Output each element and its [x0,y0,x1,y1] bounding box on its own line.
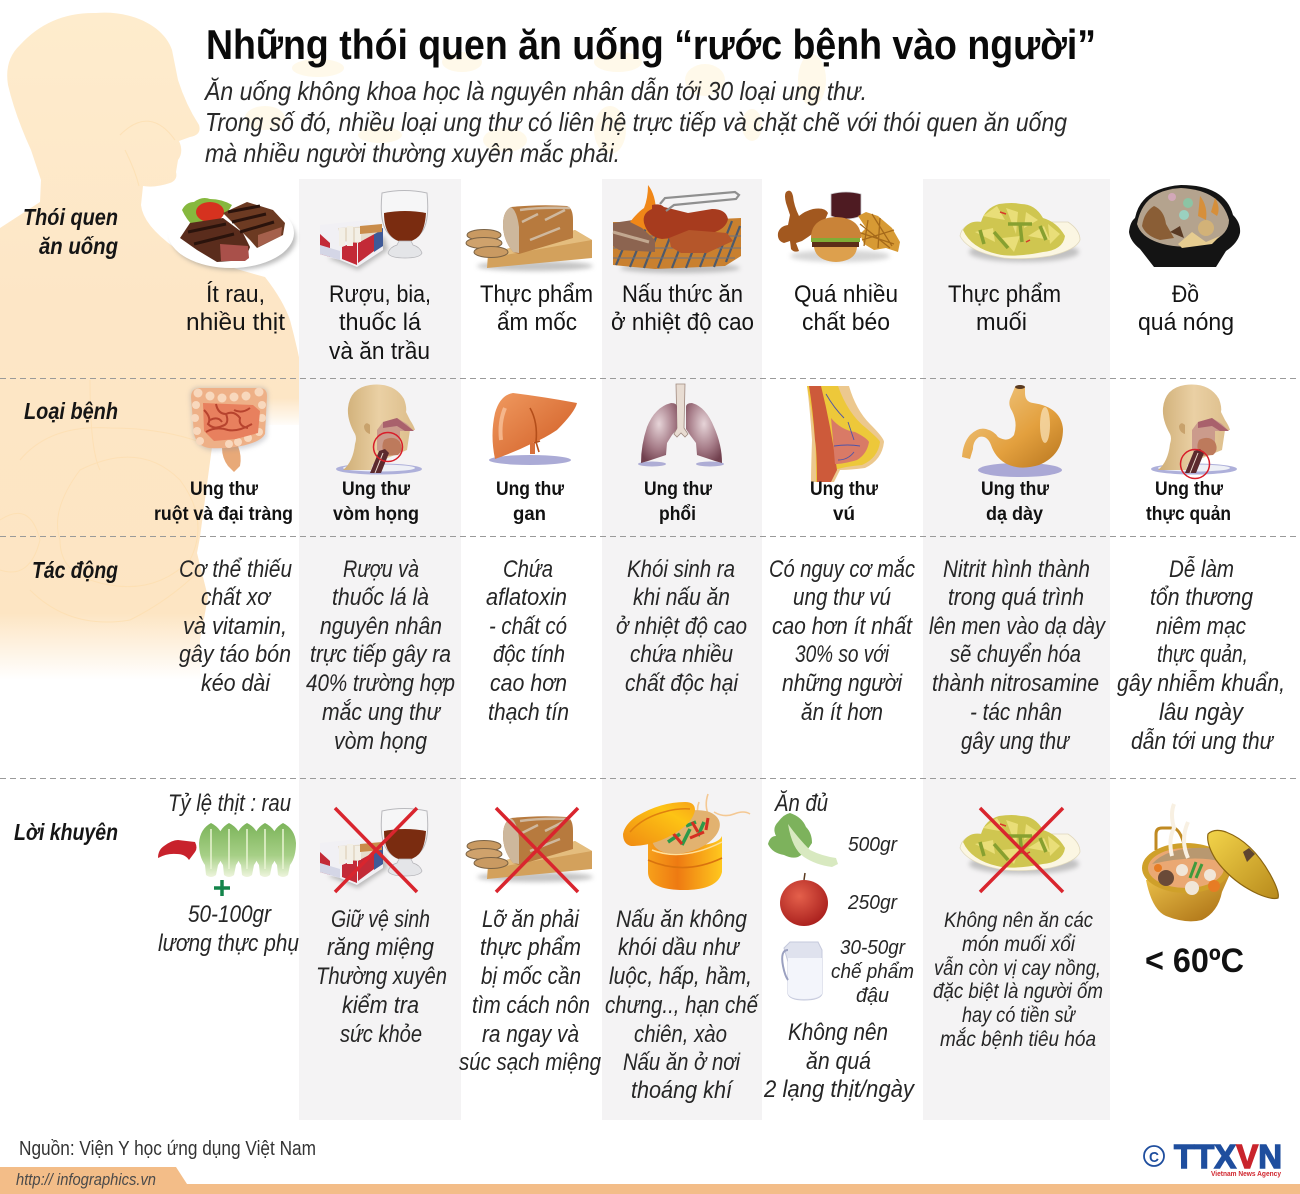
advice: no alcohol and tobacco: sức khỏe [340,1021,422,1048]
logo: TTXVN: C [1149,1149,1159,1166]
row labels: Loại bệnh [24,398,118,424]
impact: breast: ăn ít hơn [801,699,883,726]
advice: no mouldy food: bị mốc cần [481,963,581,990]
advice: avoid salted pickles [933,808,1103,1051]
impact: liver: aflatoxin [486,584,567,611]
impact: colorectal: gây táo bón [179,641,291,668]
impact: stomach: Nitrit hình thành [943,556,1090,583]
disease label: nasopharyngeal cancer: Ung thư [342,478,411,500]
habit label: too much fat: Quá nhiều [794,281,898,308]
impact: liver [486,556,569,726]
habit label: mouldy food [480,281,593,336]
disease label: stomach cancer: dạ dày [986,503,1043,525]
habit label: food too hot [1138,281,1234,336]
impact: liver: - chất có [489,613,567,640]
advice: steamer and gentle cooking: Nấu ăn không [616,906,748,933]
habit label: food too hot: quá nóng [1138,309,1234,336]
advice: no mouldy food: Lỡ ăn phải [482,906,580,933]
advice: balanced portions: 500gr [848,834,898,856]
disease label: colorectal cancer: ruột và đại tràng [154,503,293,525]
impact: breast: 30% so với [795,641,890,668]
row: impact text [179,555,1285,755]
footer band with url: http:// infographics.vn [16,1170,156,1189]
advice: balanced portions: 2 lạng thịt/ngày [763,1076,916,1103]
icon: grilled meat on fire [613,185,741,273]
impact: oesophagus: dẫn tới ung thư [1131,727,1275,755]
advice: no mouldy food: tìm cách nôn [472,992,590,1019]
advice: no alcohol and tobacco [316,808,447,1048]
row: disease types [154,384,1237,525]
advice: steamer and gentle cooking: luộc, hấp, hầm, [609,963,752,990]
impact: stomach: gây ung thư [961,728,1071,755]
impact: colorectal: kéo dài [201,670,271,697]
impact: lung: chất độc hại [625,670,739,697]
impact: lung: chứa nhiều [630,641,733,668]
advice: balanced portions: Ăn đủ [773,790,828,817]
advice: steamer and gentle cooking: chưng.., hạn chế [605,992,759,1019]
impact: colorectal: chất xơ [201,584,272,611]
grey column backgrounds [299,179,1110,1120]
impact: stomach [929,556,1107,755]
habit label: mouldy food: Thực phẩm [480,281,593,308]
disease label: breast cancer: vú [833,503,855,525]
advice: meat to vegetable ratio: Tỷ lệ thịt : rau [168,790,291,817]
impact: stomach: lên men vào dạ dày [929,613,1107,640]
impact: oesophagus: tổn thương [1150,584,1254,611]
disease label: nasopharyngeal cancer: vòm họng [333,503,419,525]
impact: lung [616,556,747,697]
logo: TTXVN: Vietnam News Agency [1211,1169,1282,1178]
disease label: oesophageal cancer: thực quản [1146,503,1231,525]
impact: liver: cao hơn [490,670,567,697]
impact: stomach: sẽ chuyển hóa [950,641,1081,668]
advice: no mouldy food: súc sạch miệng [459,1049,602,1076]
subtitle [203,76,1067,168]
impact: colorectal [179,556,292,697]
impact: lung: khi nấu ăn [633,584,730,611]
impact: oesophagus: niêm mạc [1156,613,1246,640]
impact: nasopharyngeal: trực tiếp gây ra [310,641,451,668]
advice: no alcohol and tobacco: răng miệng [327,934,435,961]
impact: nasopharyngeal: 40% trường hợp [306,670,455,697]
advice: steamer and gentle cooking [605,794,759,1104]
disease label: liver cancer: gan [513,503,546,525]
icon: cigarettes and wine [320,190,428,270]
impact: oesophagus [1117,555,1285,755]
source: Nguồn: Viện Y học ứng dụng Việt Nam [19,1138,316,1160]
icon: stomach [962,385,1063,477]
disease label: liver cancer: Ung thư [496,478,565,500]
body silhouette background [0,13,318,680]
advice: meat to vegetable ratio: lương thực phụ [158,930,299,957]
habit label: little vegetables, much meat: Ít rau, [206,281,265,308]
disease label: stomach cancer [981,478,1050,525]
advice: avoid salted pickles: Không nên ăn các [944,909,1093,932]
icon: salted pickles plate [960,203,1080,262]
advice: no alcohol and tobacco: Thường xuyên [316,963,447,990]
advice: avoid salted pickles: hay có tiền sử [962,1004,1076,1027]
habit label: cooking at high temperature: ở nhiệt độ cao [611,309,754,336]
icon: plate of steak [168,198,296,270]
impact: nasopharyngeal: Rượu và [343,556,419,583]
disease label: colorectal cancer: Ung thư [190,478,259,500]
disease label: liver cancer [496,478,565,525]
title: Những thói quen ăn uống “rước bệnh vào người” [206,21,1096,68]
icon: lungs [638,384,724,466]
advice: balanced portions: 250gr [847,892,898,914]
impact: oesophagus: lâu ngày [1159,699,1245,726]
advice: no alcohol and tobacco: Giữ vệ sinh [331,906,430,933]
row: advice [158,790,1278,1104]
advice: balanced portions [763,790,916,1103]
habit label: alcohol, tobacco, betel [329,281,431,365]
advice: meat to vegetable ratio [158,790,299,957]
advice: steamer and gentle cooking: Nấu ăn ở nơi [623,1049,741,1076]
advice: avoid salted pickles: vẫn còn vị cay nồng, [934,957,1101,980]
advice: avoid salted pickles: mắc bệnh tiêu hóa [940,1028,1096,1051]
advice: meat to vegetable ratio: 50-100gr [188,901,272,928]
row labels: Thói quen [23,204,118,230]
icon: mouldy bread [466,205,593,271]
icon: head with throat highlighted [336,385,422,474]
impact: stomach: - tác nhân [970,699,1062,726]
disease label: oesophageal cancer: Ung thư [1155,478,1224,500]
advice: no mouldy food: thực phẩm [480,934,581,961]
habit label: cooking at high temperature: Nấu thức ăn [622,281,743,308]
habit label: salted food: Thực phẩm [948,281,1061,308]
habit label: salted food [948,281,1061,336]
impact: lung: Khói sinh ra [627,556,735,583]
subtitle: mà nhiều người thường xuyên mắc phải. [205,138,620,168]
disease label: stomach cancer: Ung thư [981,478,1050,500]
advice: no mouldy food [459,808,602,1076]
advice: no mouldy food: ra ngay và [482,1021,579,1048]
row labels: Tác động [32,557,118,583]
impact: breast: ung thư vú [793,584,891,611]
icon: breast tissue [807,386,884,482]
advice: balanced portions: 30-50gr [840,937,906,959]
impact: colorectal: Cơ thể thiếu [179,556,292,583]
impact: oesophagus: Dễ làm [1169,555,1234,583]
subtitle: Trong số đó, nhiều loại ung thư có liên hệ trực tiếp và chặt chẽ với thói quen ăn uống [205,107,1067,137]
impact: liver: Chứa [503,556,553,583]
habit label: mouldy food: ẩm mốc [497,309,577,336]
habit label: cooking at high temperature [611,281,754,336]
advice: balanced portions: Không nên [788,1019,888,1046]
impact: nasopharyngeal: thuốc lá là [332,584,429,611]
advice: steamer and gentle cooking: khói dầu như [618,934,741,961]
habit label: too much fat: chất béo [802,309,890,336]
disease label: oesophageal cancer [1146,478,1231,525]
disease label: lung cancer: Ung thư [644,478,713,500]
faint food decorations behind header [245,52,826,154]
impact: nasopharyngeal [306,556,455,755]
habit label: too much fat [794,281,898,336]
impact: oesophagus: thực quản, [1157,641,1248,668]
impact: breast: cao hơn ít nhất [772,613,913,640]
impact: colorectal: và vitamin, [183,613,287,640]
habit label: alcohol, tobacco, betel: thuốc lá [339,309,422,336]
row labels: Lời khuyên [14,819,118,845]
disease label: colorectal cancer [154,478,293,525]
row: eating habits [168,185,1240,365]
advice: steamer and gentle cooking: thoáng khí [631,1077,734,1104]
advice: balanced portions: ăn quá [806,1048,871,1075]
habit label: alcohol, tobacco, betel: Rượu, bia, [329,281,431,308]
disease label: breast cancer: Ung thư [810,478,879,500]
row labels: ăn uống [39,233,118,259]
icon: burger, chicken, fries, soda [778,191,900,262]
icon: head with oesophagus highlighted [1151,385,1237,478]
advice: eat below 60 degrees [1142,804,1278,980]
impact: stomach: thành nitrosamine [932,670,1099,697]
habit label: food too hot: Đồ [1172,281,1199,308]
impact: breast: những người [782,670,903,697]
icon: steaming hot pot [1129,185,1240,267]
impact: liver: độc tính [493,641,565,668]
advice: avoid salted pickles: đặc biệt là người ốm [933,980,1103,1003]
advice: balanced portions: đậu [856,985,889,1007]
impact: nasopharyngeal: mắc ung thư [322,699,442,726]
impact: liver: thạch tín [488,699,569,726]
habit label: little vegetables, much meat [186,281,285,336]
advice: no alcohol and tobacco: kiểm tra [342,992,419,1019]
impact: lung: ở nhiệt độ cao [616,613,747,640]
impact: nasopharyngeal: vòm họng [334,728,428,755]
subtitle: Ăn uống không khoa học là nguyên nhân dẫn tới 30 loại ung thư. [203,76,867,106]
advice: steamer and gentle cooking: chiên, xào [634,1021,727,1048]
habit label: salted food: muối [976,309,1027,336]
advice: eat below 60 degrees: < 60ºC [1145,942,1244,980]
disease label: breast cancer [810,478,879,525]
advice: balanced portions: chế phẩm [831,961,914,983]
impact: breast [769,556,915,726]
icon: intestines [190,387,268,472]
impact: breast: Có nguy cơ mắc [769,556,915,583]
habit label: alcohol, tobacco, betel: và ăn trầu [329,338,430,365]
disease label: lung cancer: phổi [659,503,696,525]
impact: stomach: trong quá trình [948,584,1084,611]
disease label: nasopharyngeal cancer [333,478,419,525]
habit label: little vegetables, much meat: nhiều thịt [186,309,285,336]
advice: avoid salted pickles: món muối xổi [962,933,1076,956]
icon: liver [489,393,577,465]
footer band with url [0,1167,1300,1194]
impact: nasopharyngeal: nguyên nhân [320,613,442,640]
disease label: lung cancer [644,478,713,525]
row labels [14,204,118,845]
logo: TTXVN: TTXVN [1174,1138,1282,1175]
